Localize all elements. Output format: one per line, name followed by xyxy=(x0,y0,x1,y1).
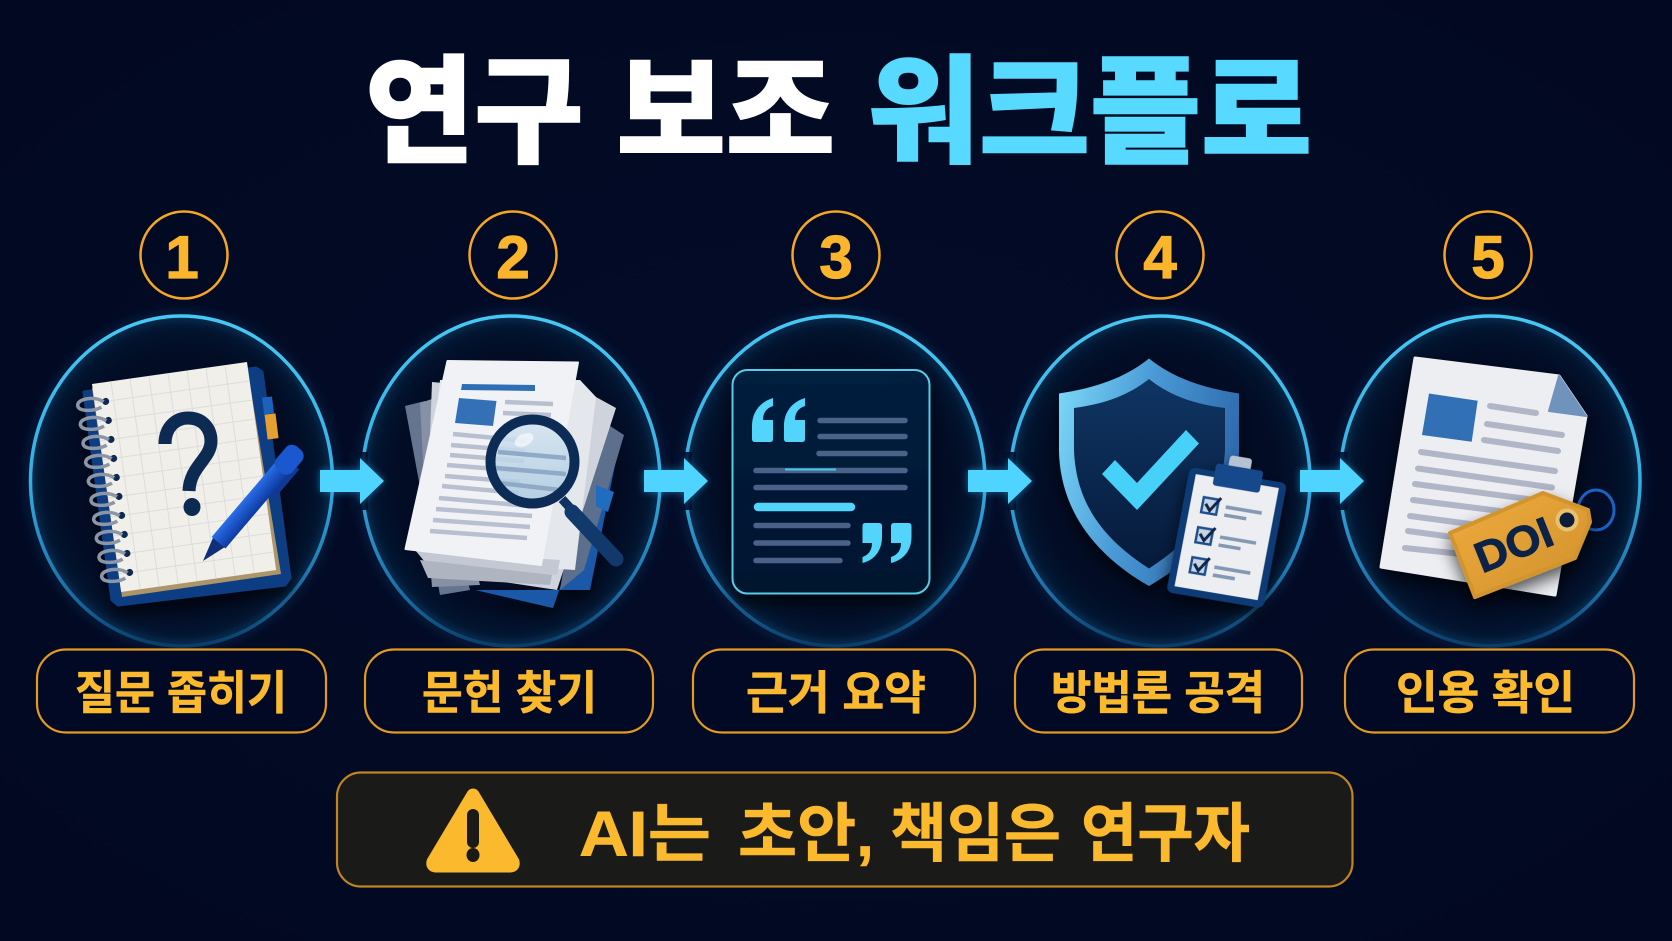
step 1: narrow the question xyxy=(30,212,332,732)
number badge 3 xyxy=(792,212,880,298)
title xyxy=(365,47,1312,178)
icon: document with DOI tag: DOI xyxy=(1468,508,1560,583)
step 2: find literature xyxy=(362,212,660,732)
number badge 3: 3 xyxy=(819,224,853,291)
number badge 4: 4 xyxy=(1143,224,1177,291)
number badge 2: 2 xyxy=(496,224,530,291)
icon: notebook with question mark and pen xyxy=(75,362,310,605)
icon: stacked papers with magnifier xyxy=(405,361,624,608)
ring 4 xyxy=(1010,316,1310,646)
number badge 2 xyxy=(470,212,556,298)
label pill 4 xyxy=(1015,650,1302,732)
label pill 5 xyxy=(1345,650,1634,732)
step 3: summarize evidence xyxy=(685,212,985,732)
callout text: AI는 xyxy=(579,798,711,870)
number badge 1 xyxy=(140,212,228,298)
icon: quote card xyxy=(732,370,930,594)
arrow 4 to 5 xyxy=(1300,452,1364,510)
arrow 2 to 3 xyxy=(644,452,708,510)
callout text: 초안, xyxy=(738,798,874,870)
label pill 1: 질문 좁히기 xyxy=(75,667,287,719)
icon: shield with clipboard xyxy=(1059,358,1290,608)
number badge 5: 5 xyxy=(1471,224,1505,291)
label pill 3 xyxy=(693,650,975,732)
label pill 3: 근거 요약 xyxy=(746,667,926,719)
ring 5 xyxy=(1340,316,1640,646)
label pill 1 xyxy=(37,650,326,732)
label pill 2: 문헌 찾기 xyxy=(422,667,597,719)
callout text: 연구자 xyxy=(1081,798,1250,870)
arrow 1 to 2 xyxy=(320,452,384,510)
title: 연구 보조 xyxy=(365,47,835,178)
ring 1 xyxy=(30,316,332,646)
label pill 2 xyxy=(365,650,653,732)
arrow 3 to 4 xyxy=(968,452,1032,510)
step 5: check citation xyxy=(1340,212,1640,732)
label pill 4: 방법론 공격 xyxy=(1051,667,1265,719)
ring 3 xyxy=(685,316,985,646)
number badge 4 xyxy=(1116,212,1204,298)
icon: document with DOI tag xyxy=(1381,358,1614,597)
icon: warning triangle xyxy=(433,795,513,866)
callout text xyxy=(579,798,1250,870)
title: 워크플로 xyxy=(868,47,1312,178)
number badge 1: 1 xyxy=(165,224,199,291)
callout text: 책임은 xyxy=(890,798,1061,870)
label pill 5: 인용 확인 xyxy=(1396,667,1575,719)
step 4: attack methodology xyxy=(1010,212,1310,732)
callout banner xyxy=(337,772,1352,886)
ring 2 xyxy=(362,316,660,646)
number badge 5 xyxy=(1444,212,1532,298)
